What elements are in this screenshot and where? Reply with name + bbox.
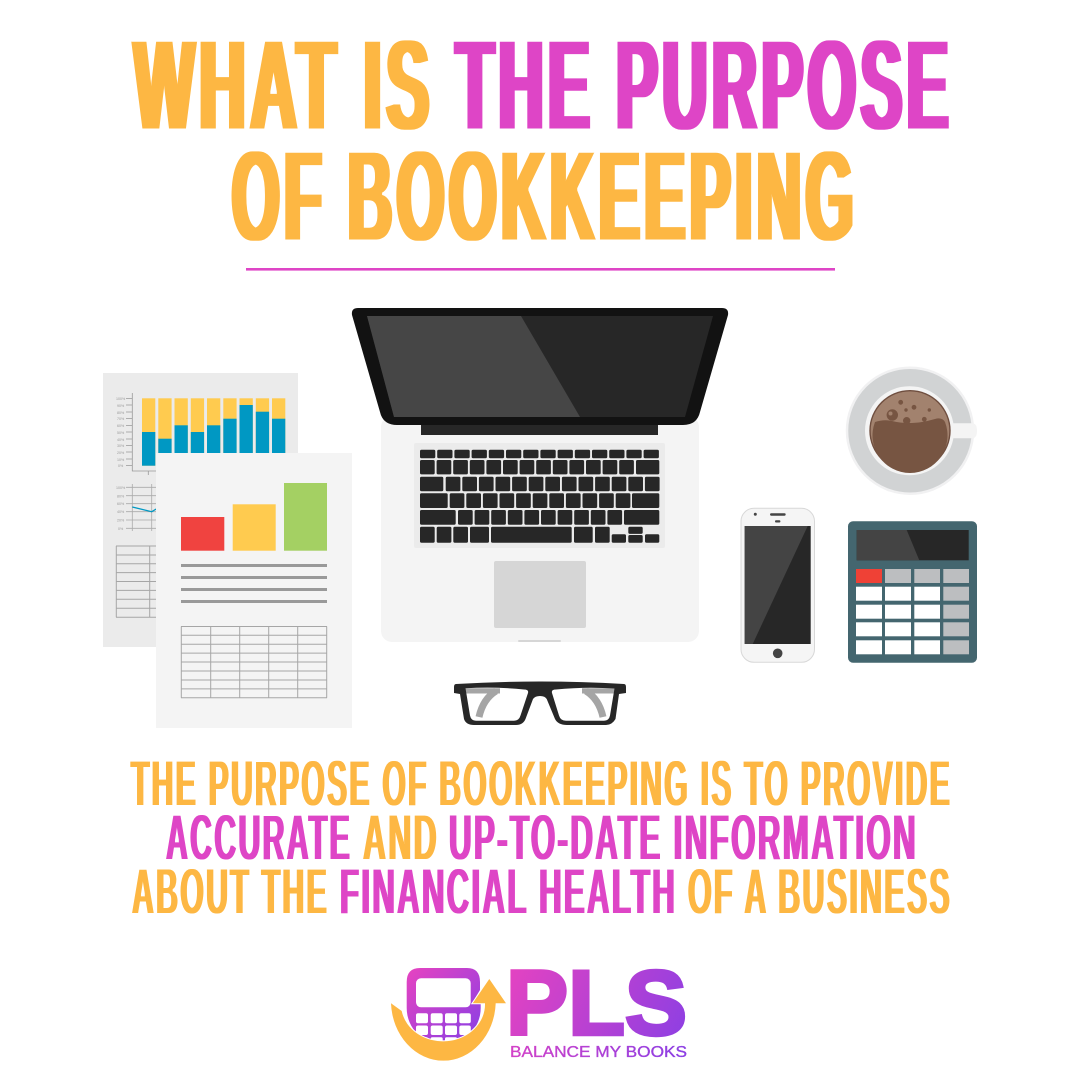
- stacked bar chart: 70%: [117, 417, 125, 421]
- stacked bar chart: 100%: [116, 397, 126, 401]
- title: WHAT IS: [134, 14, 434, 158]
- illustration: glasses: [454, 682, 626, 725]
- laptop screen: [367, 316, 713, 417]
- stacked bar chart: 50%: [117, 431, 125, 435]
- bar chart: [181, 483, 327, 551]
- illustration: smartphone: [741, 508, 814, 662]
- calculator display: [857, 530, 969, 560]
- calculator keys: [856, 569, 969, 654]
- title: [134, 14, 953, 268]
- logo icon: calculator: [407, 968, 481, 1045]
- stacked bar chart: 40%: [117, 438, 125, 442]
- cup rim: [865, 386, 954, 475]
- line chart: 80%: [117, 494, 125, 498]
- line chart: 40%: [117, 510, 125, 514]
- illustration: calculator: [848, 521, 977, 663]
- stacked bar chart: 60%: [117, 424, 125, 428]
- front notch: [518, 640, 561, 642]
- table: [181, 626, 327, 698]
- logo icon: circular arrow: [391, 979, 506, 1061]
- line chart: 0%: [118, 527, 124, 531]
- logo wordmark: PLS: [506, 952, 687, 1054]
- summary statement: FINANCIAL HEALTH: [340, 854, 677, 928]
- glasses frame: [454, 682, 626, 725]
- illustration: laptop: [352, 308, 728, 642]
- stacked bar chart: 20%: [117, 451, 125, 455]
- saucer: [847, 368, 973, 494]
- line chart: 20%: [117, 518, 125, 522]
- cup handle: [945, 423, 977, 438]
- phone screen: [745, 526, 811, 644]
- line chart: 60%: [117, 502, 125, 506]
- home button: [773, 648, 782, 658]
- laptop base: [381, 416, 699, 642]
- line chart: [116, 484, 160, 531]
- illustration: back report page: [103, 373, 298, 647]
- stacked bar chart: [116, 393, 285, 475]
- illustration: front report page: [156, 453, 352, 728]
- line chart: 100%: [116, 486, 126, 490]
- summary statement: AND: [363, 800, 439, 874]
- stacked bar chart: 10%: [117, 458, 125, 462]
- summary statement: ACCURATE: [166, 800, 352, 874]
- title underline: [246, 268, 835, 271]
- speaker and camera: [754, 513, 786, 522]
- stacked bar chart: 0%: [118, 464, 124, 468]
- summary statement: ABOUT THE: [132, 854, 329, 928]
- summary statement: [131, 746, 952, 928]
- illustration: coffee cup: [847, 368, 977, 494]
- text lines: [181, 564, 327, 603]
- stacked bar chart: 80%: [117, 411, 125, 415]
- logo: [391, 952, 687, 1061]
- laptop lid: [352, 308, 728, 425]
- back table: [116, 546, 160, 617]
- glasses arms: [464, 688, 616, 717]
- stacked bar chart: 30%: [117, 444, 125, 448]
- stacked bar chart: 90%: [117, 404, 125, 408]
- coffee: [869, 390, 951, 473]
- hinge: [421, 425, 658, 435]
- logo tagline: BALANCE MY BOOKS: [510, 1044, 687, 1061]
- keyboard: [414, 443, 665, 548]
- trackpad: [494, 561, 586, 628]
